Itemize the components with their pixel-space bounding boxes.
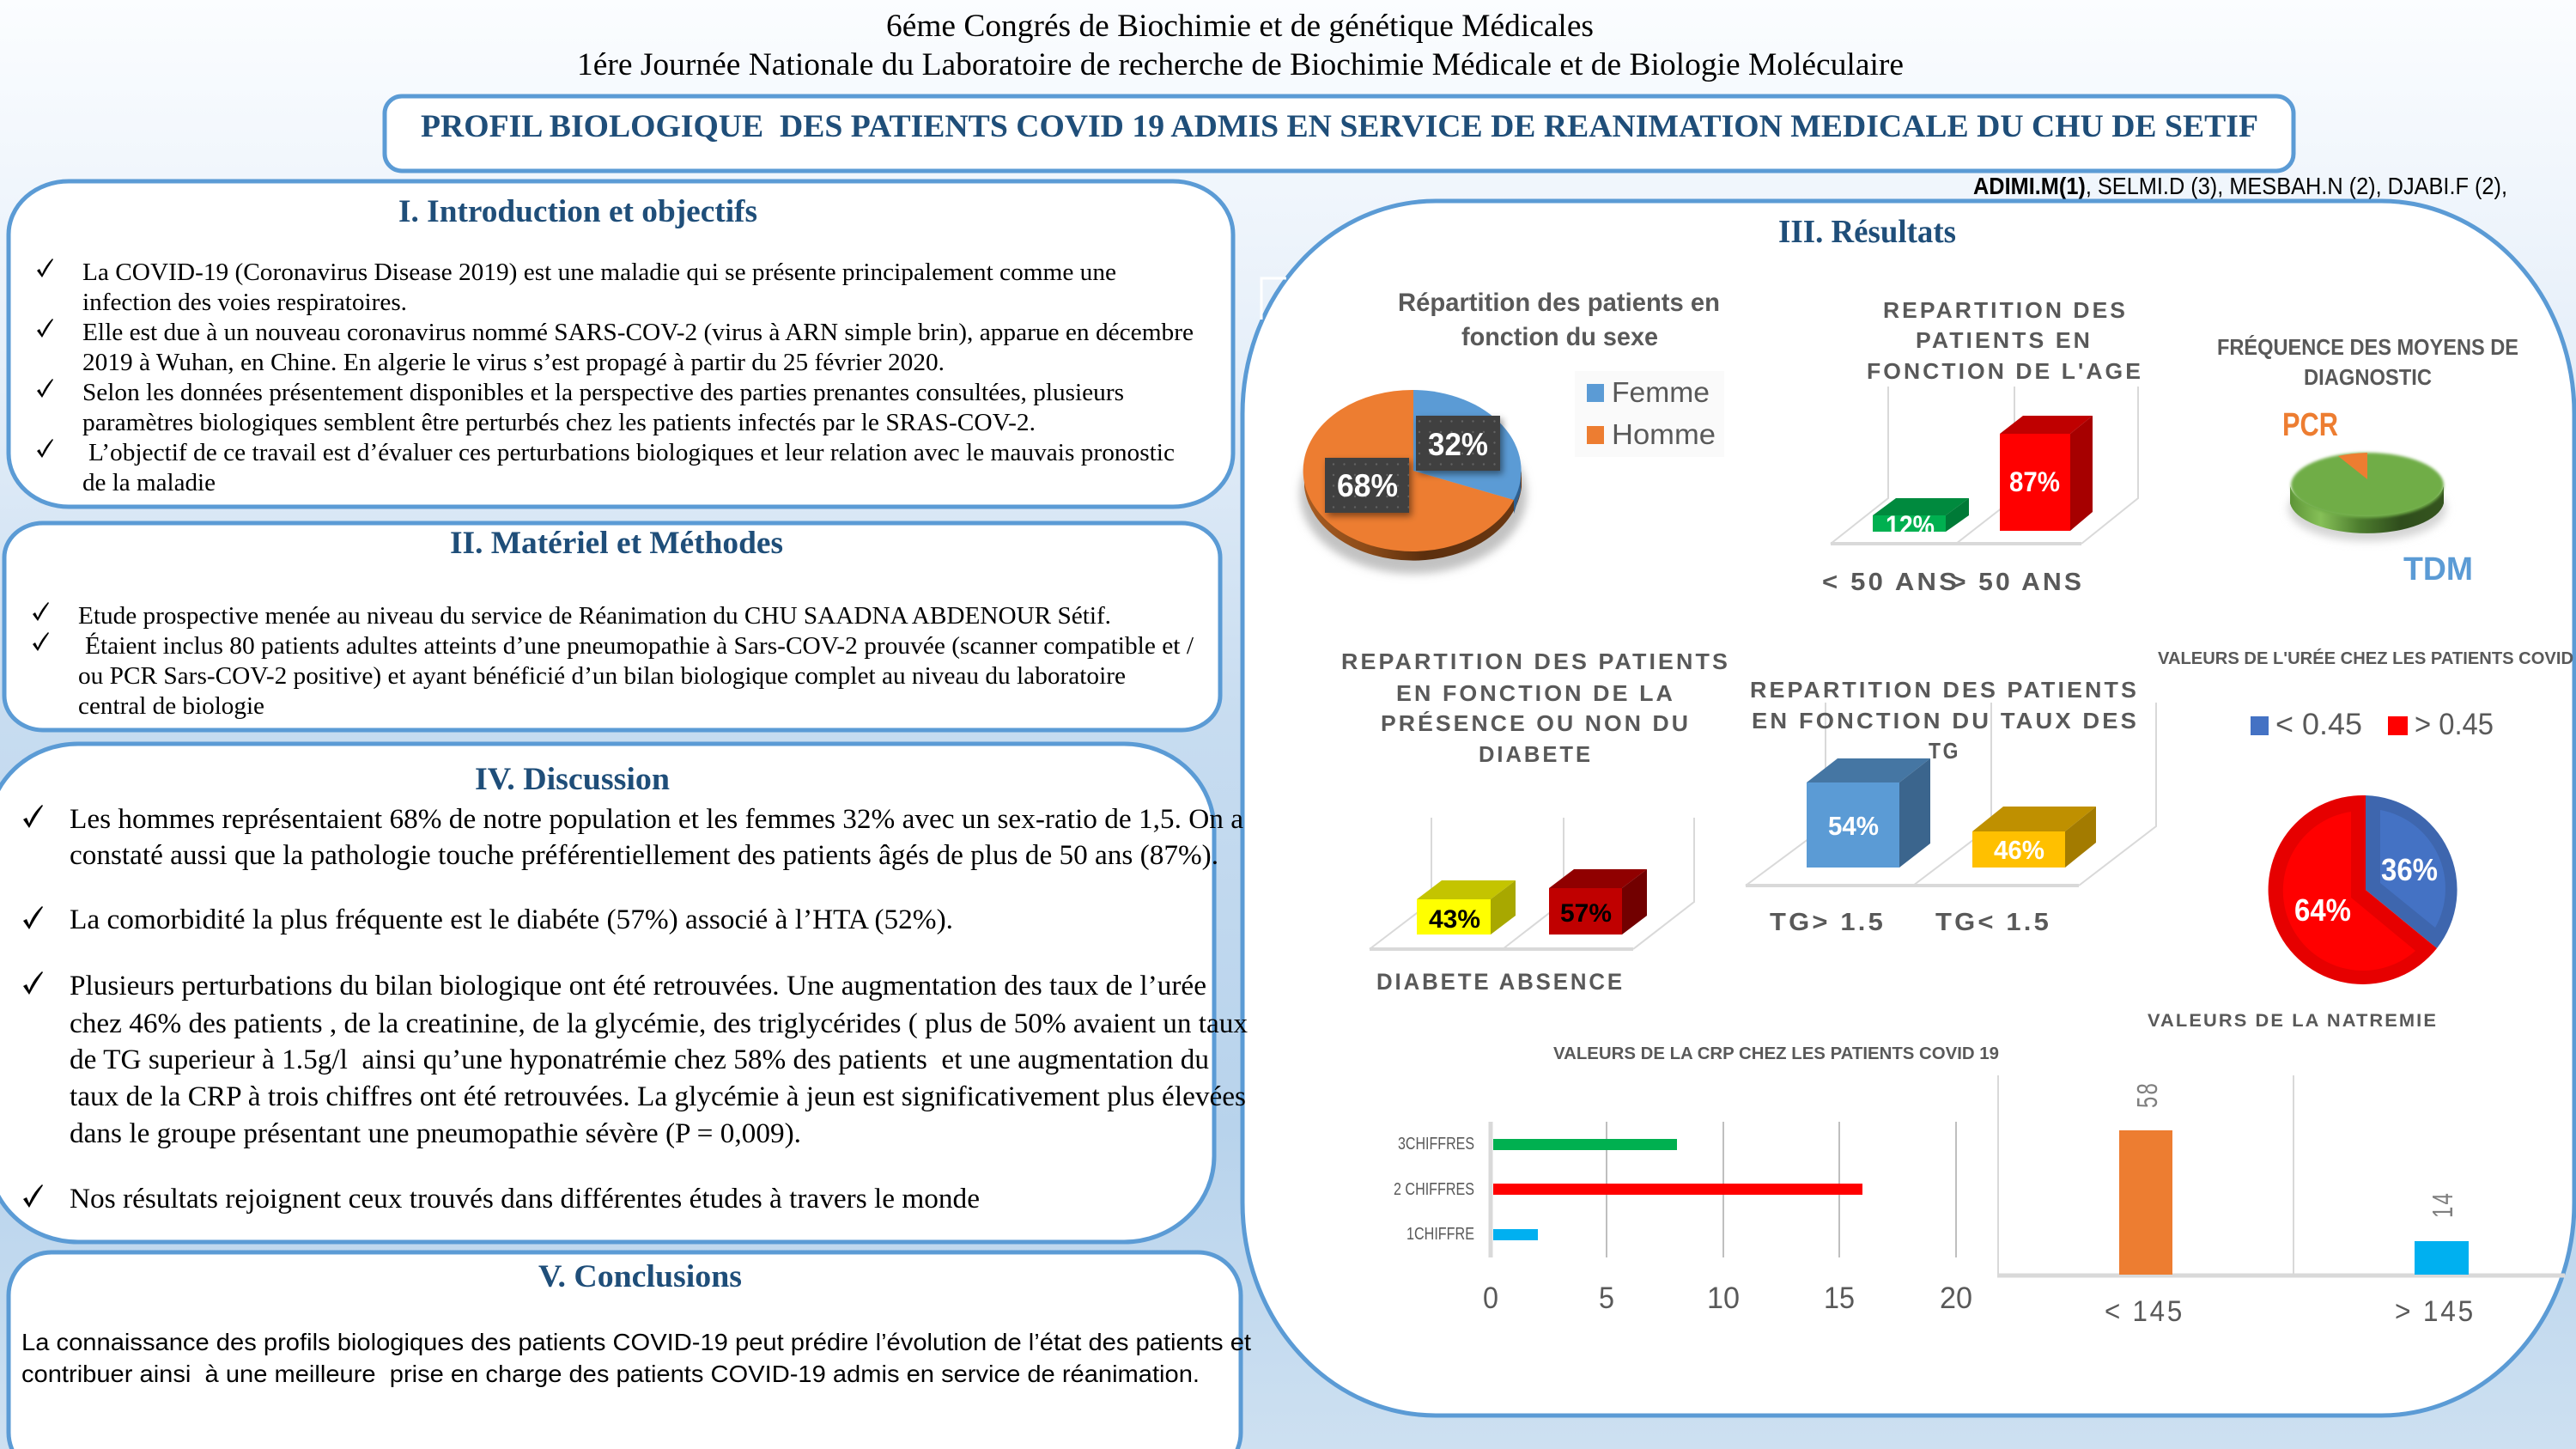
axis labels: TG: TG< 1.5 [1935, 909, 2051, 936]
heading: methods: II. Matériel et Méthodes [450, 526, 783, 561]
text: introduction: Elle est due à un nouveau coronavirus nommé SARS-COV-2 (virus à ARN simple brin), apparue en décembre [82, 320, 1194, 346]
axis labels: age [1822, 569, 2084, 596]
chart: diagnostic frequency [2217, 334, 2518, 588]
legend: sex: Femme [1612, 376, 1710, 408]
congress header: 6éme Congrés de Biochimie et de génétique Médicales [886, 9, 1594, 44]
bar: TG under 1.5: 46% [1994, 835, 2044, 865]
chart title: sex: Répartition des patients en [1398, 289, 1720, 317]
text: conclusions: La connaissance des profils biologiques des patients COVID-19 peut prédire l’évolution de l’état des patients et [21, 1329, 1251, 1355]
chart title: diagnostic: DIAGNOSTIC [2304, 364, 2432, 390]
chart title: TG: TG [1929, 738, 1960, 764]
text: discussion: Plusieurs perturbations du bilan biologique ont été retrouvées. Une augmentation des taux de l’urée [70, 971, 1206, 1002]
text: discussion: Les hommes représentaient 68% de notre population et les femmes 32% avec un sex-ratio de 1,5. On a [70, 804, 1243, 835]
chart: age distribution [1822, 297, 2143, 596]
bar: over 50 [2000, 416, 2093, 531]
panel: introduction [9, 181, 1233, 507]
text: discussion [70, 804, 1249, 1215]
chart title: diabetes: DIABETE [1479, 741, 1593, 767]
bar: 2 chiffres [1493, 1184, 1862, 1195]
text: discussion: dans le groupe présentant une pneumopathie sévère (P = 0,009). [70, 1118, 801, 1149]
axis labels: diabetes: DIABETE ABSENCE [1376, 969, 1625, 995]
bar: diabetes 43 [1417, 880, 1516, 935]
category labels: CRP: 1CHIFFRE [1406, 1225, 1474, 1244]
text: discussion: constaté aussi que la pathologie touche préférentiellement des patients âgés de plus de 50 ans (87%). [70, 840, 1218, 871]
chart title: age: FONCTION DE L'AGE [1867, 358, 2143, 384]
axis values: CRP: 15 [1824, 1282, 1855, 1315]
axis values: CRP: 0 [1483, 1282, 1498, 1315]
text: methods: central de biologie [78, 693, 264, 720]
chart title: age: PATIENTS EN [1916, 327, 2093, 353]
text: introduction: paramètres biologiques semblent être perturbés chez les patients infectés par le SRAS-COV-2. [82, 410, 1036, 436]
icons: check marks introduction [37, 259, 53, 458]
chart title: urea: VALEURS DE L'URÉE CHEZ LES PATIENTS COVID [2158, 648, 2573, 668]
chart: pie sex distribution [1300, 289, 1724, 574]
text: introduction: infection des voies respiratoires. [82, 289, 407, 316]
text: methods: Étaient inclus 80 patients adultes atteints d’une pneumopathie à Sars-COV-2 prouvée (scanner compatible et / [85, 633, 1194, 660]
legend: sex [1575, 371, 1724, 457]
text: discussion: La comorbidité la plus fréquente est le diabéte (57%) associé à l’HTA (52%). [70, 904, 953, 935]
authors: ADIMI.M(1), SELMI.D (3), MESBAH.N (2), DJABI.F (2), [1973, 173, 2507, 199]
text: discussion: de TG superieur à 1.5g/l ainsi qu’une hyponatrémie chez 58% des patients et une augmentation du [70, 1044, 1209, 1075]
axis labels: natremia: > 145 [2395, 1295, 2476, 1328]
text: discussion: chez 46% des patients , de la creatinine, de la glycémie, des triglycérides ( plus de 50% avaient un taux [70, 1008, 1249, 1039]
pie graphic: sex [1300, 390, 1527, 574]
chart title: diabetes: REPARTITION DES PATIENTS [1341, 648, 1730, 674]
axis labels: natremia: < 145 [2105, 1295, 2184, 1328]
bar: over 50: 87% [2009, 466, 2060, 497]
text: introduction [82, 259, 1194, 496]
label: TDM: TDM [2403, 551, 2473, 588]
congress header [577, 9, 1904, 82]
chart title: sex [1398, 289, 1720, 351]
chart: diabetes [1341, 648, 1730, 995]
heading: results: III. Résultats [1778, 214, 1956, 250]
panel: conclusions [9, 1252, 1251, 1449]
chart title: diabetes: PRÉSENCE OU NON DU [1381, 710, 1691, 736]
chart title: diagnostic: FRÉQUENCE DES MOYENS DE [2217, 334, 2518, 360]
axis labels: TG [1770, 909, 2051, 936]
bar: 1 chiffre [1493, 1229, 1538, 1240]
pie graphic: diagnostic [2288, 453, 2446, 541]
pie graphic: urea: 36% [2381, 852, 2438, 887]
axis values: CRP: 20 [1940, 1282, 1972, 1315]
axis labels: TG: TG> 1.5 [1770, 909, 1886, 936]
chart title: diagnostic [2217, 334, 2518, 390]
icons: check marks methods [33, 602, 49, 651]
text: introduction: L’objectif de ce travail est d’évaluer ces perturbations biologiques et leur relation avec le mauvais pronostic [88, 440, 1175, 466]
category labels: CRP: 3CHIFFRES [1398, 1135, 1474, 1154]
category labels: CRP [1394, 1135, 1474, 1244]
heading: discussion: IV. Discussion [475, 762, 670, 797]
chart title: TG: REPARTITION DES PATIENTS [1750, 677, 2139, 703]
text: introduction: 2019 à Wuhan, en Chine. En algerie le virus s’est propagé à partir du 25 février 2020. [82, 350, 945, 376]
pie graphic: urea [2269, 795, 2458, 984]
axis values: CRP: 10 [1707, 1282, 1740, 1315]
heading: conclusions: V. Conclusions [538, 1259, 742, 1294]
chart title: diabetes: EN FONCTION DE LA [1396, 680, 1675, 706]
text: introduction: La COVID-19 (Coronavirus Disease 2019) est une maladie qui se présente principalement comme une [82, 259, 1116, 286]
bar: TG under 1.5 [1972, 807, 2096, 868]
chart title: age [1867, 297, 2143, 384]
legend: sex: Homme [1612, 418, 1716, 450]
value: 58: 58 [2131, 1081, 2163, 1108]
icons: check marks discussion [23, 805, 43, 1208]
chart title: sex: fonction du sexe [1461, 323, 1658, 351]
text: methods [78, 603, 1194, 720]
axis values: CRP: 5 [1599, 1282, 1614, 1315]
chart: urea pie [2158, 648, 2573, 984]
chart title: TG: EN FONCTION DU TAUX DES [1752, 708, 2139, 734]
legend: urea: > 0.45 [2415, 708, 2494, 741]
text: methods: Etude prospective menée au niveau du service de Réanimation du CHU SAADNA ABDENOUR Sétif. [78, 603, 1111, 630]
legend: urea [2251, 708, 2494, 741]
axis labels: age: < 50 ANS [1822, 569, 1959, 596]
chart title: diabetes [1341, 648, 1730, 767]
bar: TG over 1.5 [1807, 758, 1930, 868]
chart title: TG [1750, 677, 2139, 764]
legend: urea: < 0.45 [2275, 708, 2362, 741]
axis labels: natremia [2105, 1295, 2476, 1328]
bar: under 50 [1873, 498, 1969, 532]
text: methods: ou PCR Sars-COV-2 positive) et ayant bénéficié d’un bilan biologique complet au niveau du laboratoire [78, 663, 1126, 690]
bar: absence 57 [1549, 869, 1647, 935]
bar: TG over 1.5: 54% [1828, 811, 1879, 841]
chart: triglycerides [1746, 677, 2156, 936]
pie graphic: sex: 32% [1428, 427, 1488, 462]
pie graphic: urea: 64% [2294, 892, 2351, 928]
text: conclusions [21, 1329, 1251, 1387]
pie graphic: sex: 68% [1337, 468, 1398, 503]
chart title: natremia: VALEURS DE LA NATREMIE [2148, 1011, 2438, 1031]
value: 14: 14 [2427, 1191, 2458, 1218]
bar: under 145 [2119, 1130, 2172, 1275]
bar: absence 57: 57% [1560, 899, 1612, 928]
heading: introduction: I. Introduction et objectifs [398, 194, 757, 229]
bar: diabetes 43: 43% [1429, 905, 1480, 934]
text: discussion: taux de la CRP à trois chiffres ont été retrouvées. La glycémie à jeun est significativement plus élevées [70, 1081, 1246, 1112]
bar: over 145 [2415, 1241, 2469, 1275]
text: conclusions: contribuer ainsi à une meilleure prise en charge des patients COVID-19 admis en service de réanimation. [21, 1361, 1200, 1387]
chart: natremia bars [1997, 1011, 2565, 1328]
text: discussion: Nos résultats rejoignent ceux trouvés dans différentes études à travers le monde [70, 1184, 980, 1215]
bar: 3 chiffres [1493, 1139, 1677, 1150]
title box [385, 96, 2293, 171]
axis values: CRP [1483, 1282, 1972, 1315]
panel: discussion [0, 744, 1249, 1242]
chart: CRP bars [1394, 1044, 1999, 1315]
title box: PROFIL BIOLOGIQUE DES PATIENTS COVID 19 ADMIS EN SERVICE DE REANIMATION MEDICALE DU CHU DE SETIF [421, 109, 2258, 144]
axis labels: age: > 50 ANS [1951, 569, 2084, 596]
panel: results [1242, 201, 2574, 1416]
text: introduction: Selon les données présentement disponibles et la perspective des parties prenantes consultées, plusieurs [82, 380, 1124, 406]
bar: under 50: 12% [1886, 510, 1935, 541]
panel: methods [4, 523, 1220, 730]
label: PCR: PCR [2282, 407, 2338, 443]
category labels: CRP: 2 CHIFFRES [1394, 1180, 1474, 1199]
chart title: CRP: VALEURS DE LA CRP CHEZ LES PATIENTS COVID 19 [1553, 1044, 1999, 1063]
congress header: 1ére Journée Nationale du Laboratoire de recherche de Biochimie Médicale et de Biologie Moléculaire [577, 47, 1904, 82]
chart title: age: REPARTITION DES [1883, 297, 2128, 323]
text: introduction: de la maladie [82, 470, 216, 496]
